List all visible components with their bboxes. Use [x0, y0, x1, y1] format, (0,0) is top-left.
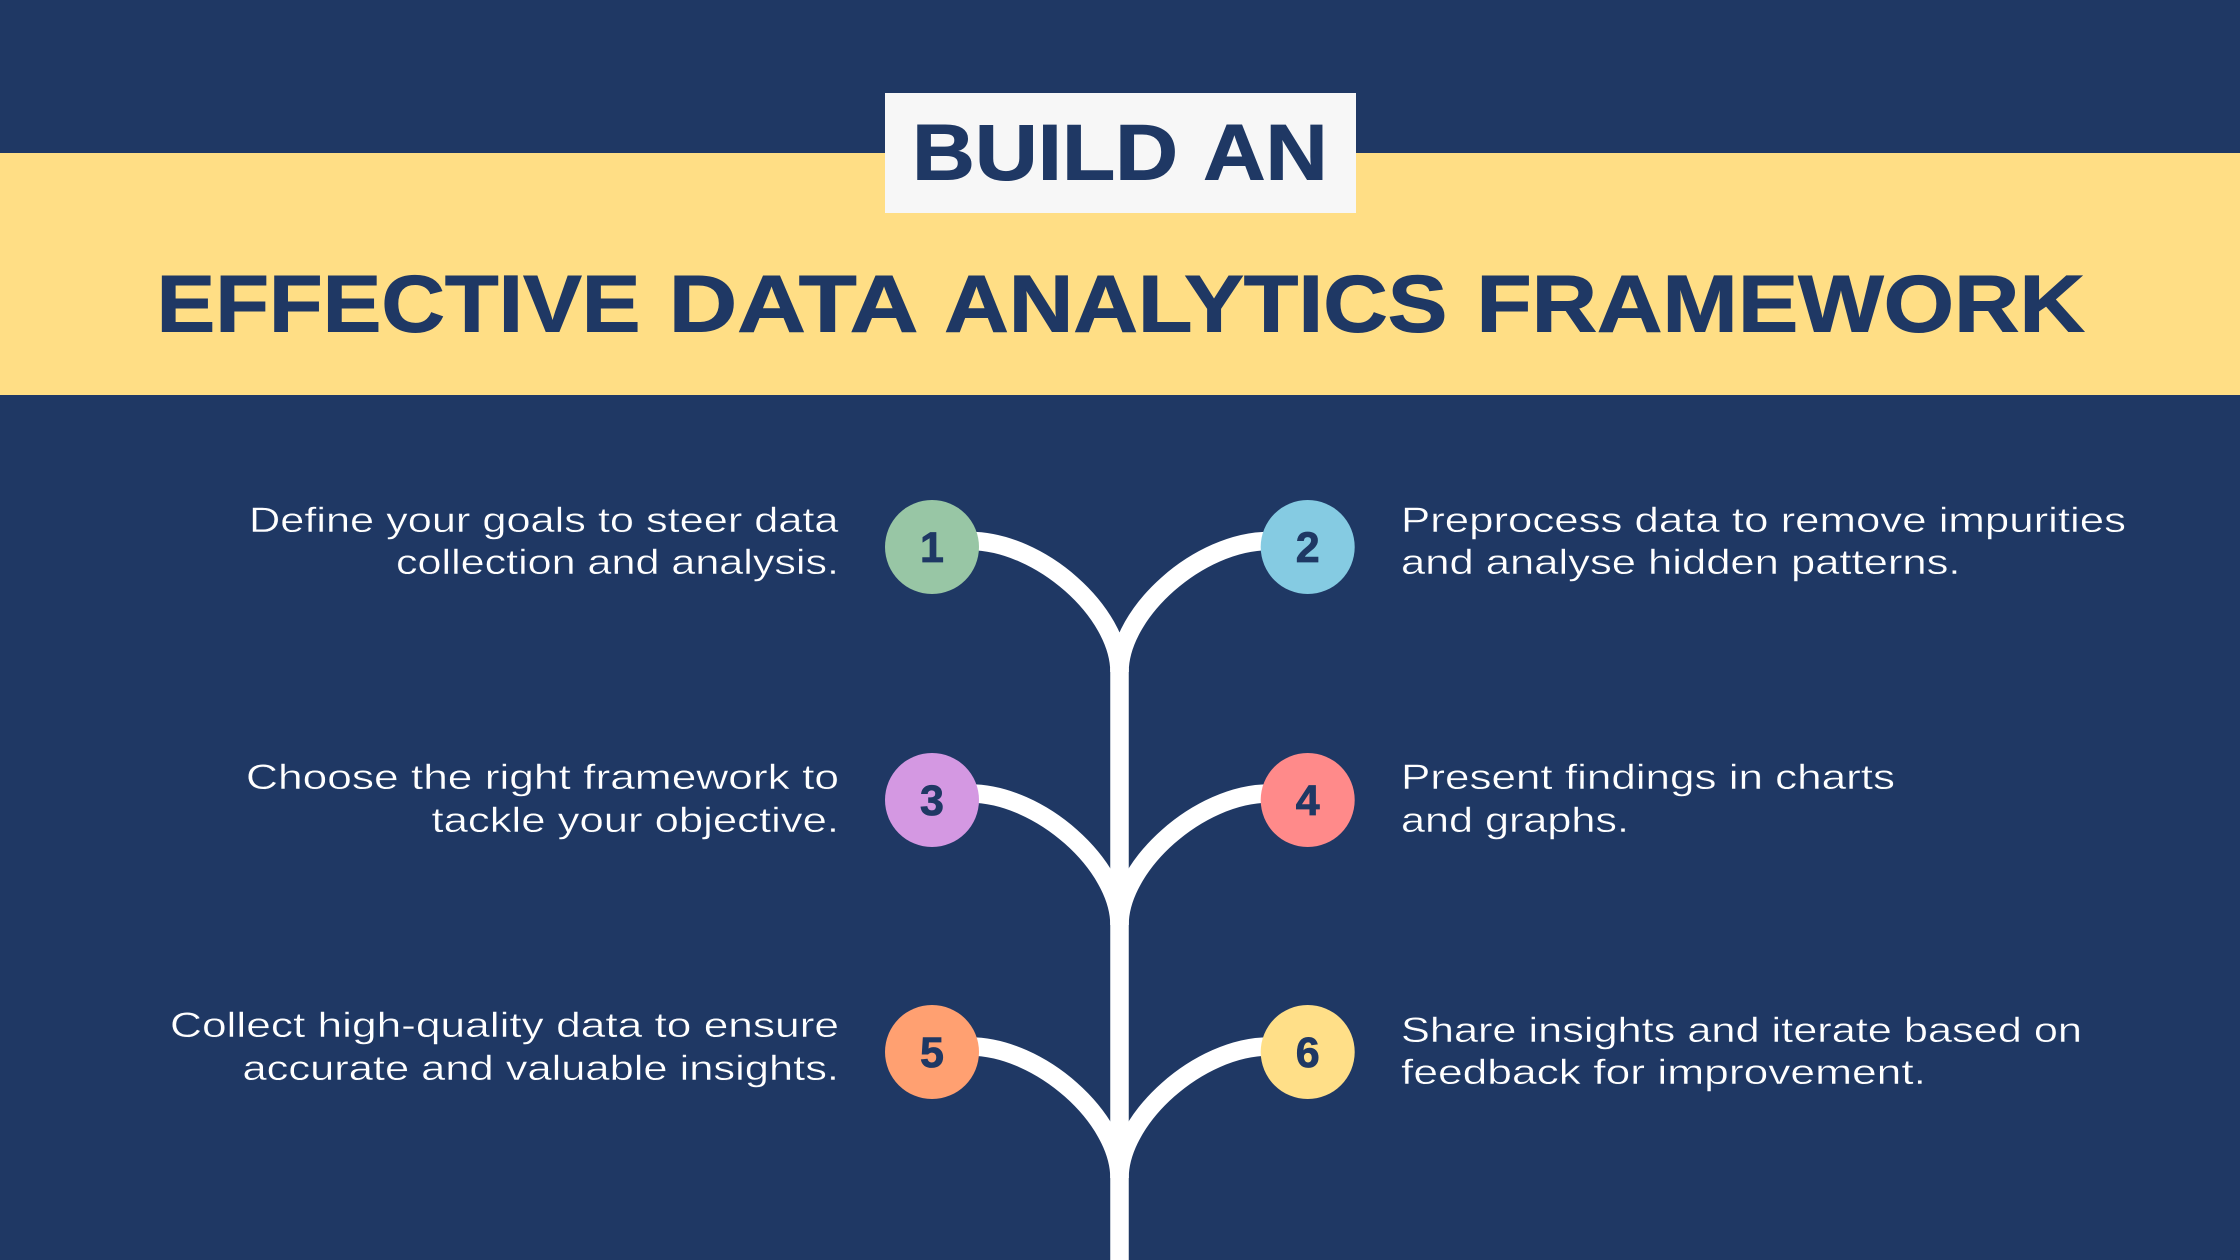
step 3 node	[885, 753, 979, 847]
title box: build an	[885, 93, 1356, 213]
step 1 text: collection and analysis.	[396, 543, 839, 582]
branch 1	[970, 541, 1120, 672]
step 4 node	[1261, 753, 1355, 847]
step 6 text	[1401, 1011, 2082, 1092]
branch 2	[1120, 541, 1269, 672]
step 4 text: Present findings in charts	[1401, 758, 1895, 797]
step 2 node: 2	[1296, 524, 1320, 572]
step 1 text	[249, 501, 839, 582]
step 6 node	[1261, 1005, 1355, 1099]
step 4 text	[1401, 758, 1895, 840]
title: effective data analytics framework: DATA	[669, 260, 918, 350]
step 3 text	[246, 758, 839, 840]
step 3 text: Choose the right framework to	[246, 758, 839, 797]
branch 5	[970, 1046, 1120, 1178]
title box: build an: AN	[1203, 108, 1328, 196]
branch 4	[1120, 794, 1269, 925]
step 6 node: 6	[1296, 1029, 1320, 1077]
title: effective data analytics framework: EFFECTIVE	[156, 260, 640, 350]
step 3 text: tackle your objective.	[432, 801, 839, 840]
step 1 node	[885, 500, 979, 594]
step 1 text: Define your goals to steer data	[249, 501, 839, 540]
step 1 node: 1	[920, 524, 944, 572]
step 2 text: Preprocess data to remove impurities	[1401, 501, 2126, 540]
step 5 node	[885, 1005, 979, 1099]
title box: build an: BUILD	[912, 108, 1178, 196]
trunk	[1110, 668, 1129, 1260]
step 4 node: 4	[1296, 777, 1320, 825]
branch 6	[1120, 1046, 1269, 1178]
step 5 text: accurate and valuable insights.	[242, 1049, 839, 1088]
yellow title band	[0, 153, 2240, 395]
branch 3	[970, 794, 1120, 925]
step 6 text: Share insights and iterate based on	[1401, 1011, 2082, 1050]
step 5 text: Collect high-quality data to ensure	[170, 1006, 839, 1045]
step 5 text	[170, 1006, 839, 1088]
tree diagram	[970, 541, 1269, 1260]
title: effective data analytics framework	[156, 260, 2085, 350]
step 2 node	[1261, 500, 1355, 594]
title: effective data analytics framework: FRAMEWORK	[1476, 260, 2085, 350]
step 3 node: 3	[920, 777, 944, 825]
step 5 node: 5	[920, 1029, 944, 1077]
step 6 text: feedback for improvement.	[1401, 1053, 1926, 1092]
title: effective data analytics framework: ANALYTICS	[944, 260, 1447, 350]
step 2 text: and analyse hidden patterns.	[1401, 543, 1960, 582]
step 2 text	[1401, 501, 2126, 582]
step 4 text: and graphs.	[1401, 801, 1629, 840]
